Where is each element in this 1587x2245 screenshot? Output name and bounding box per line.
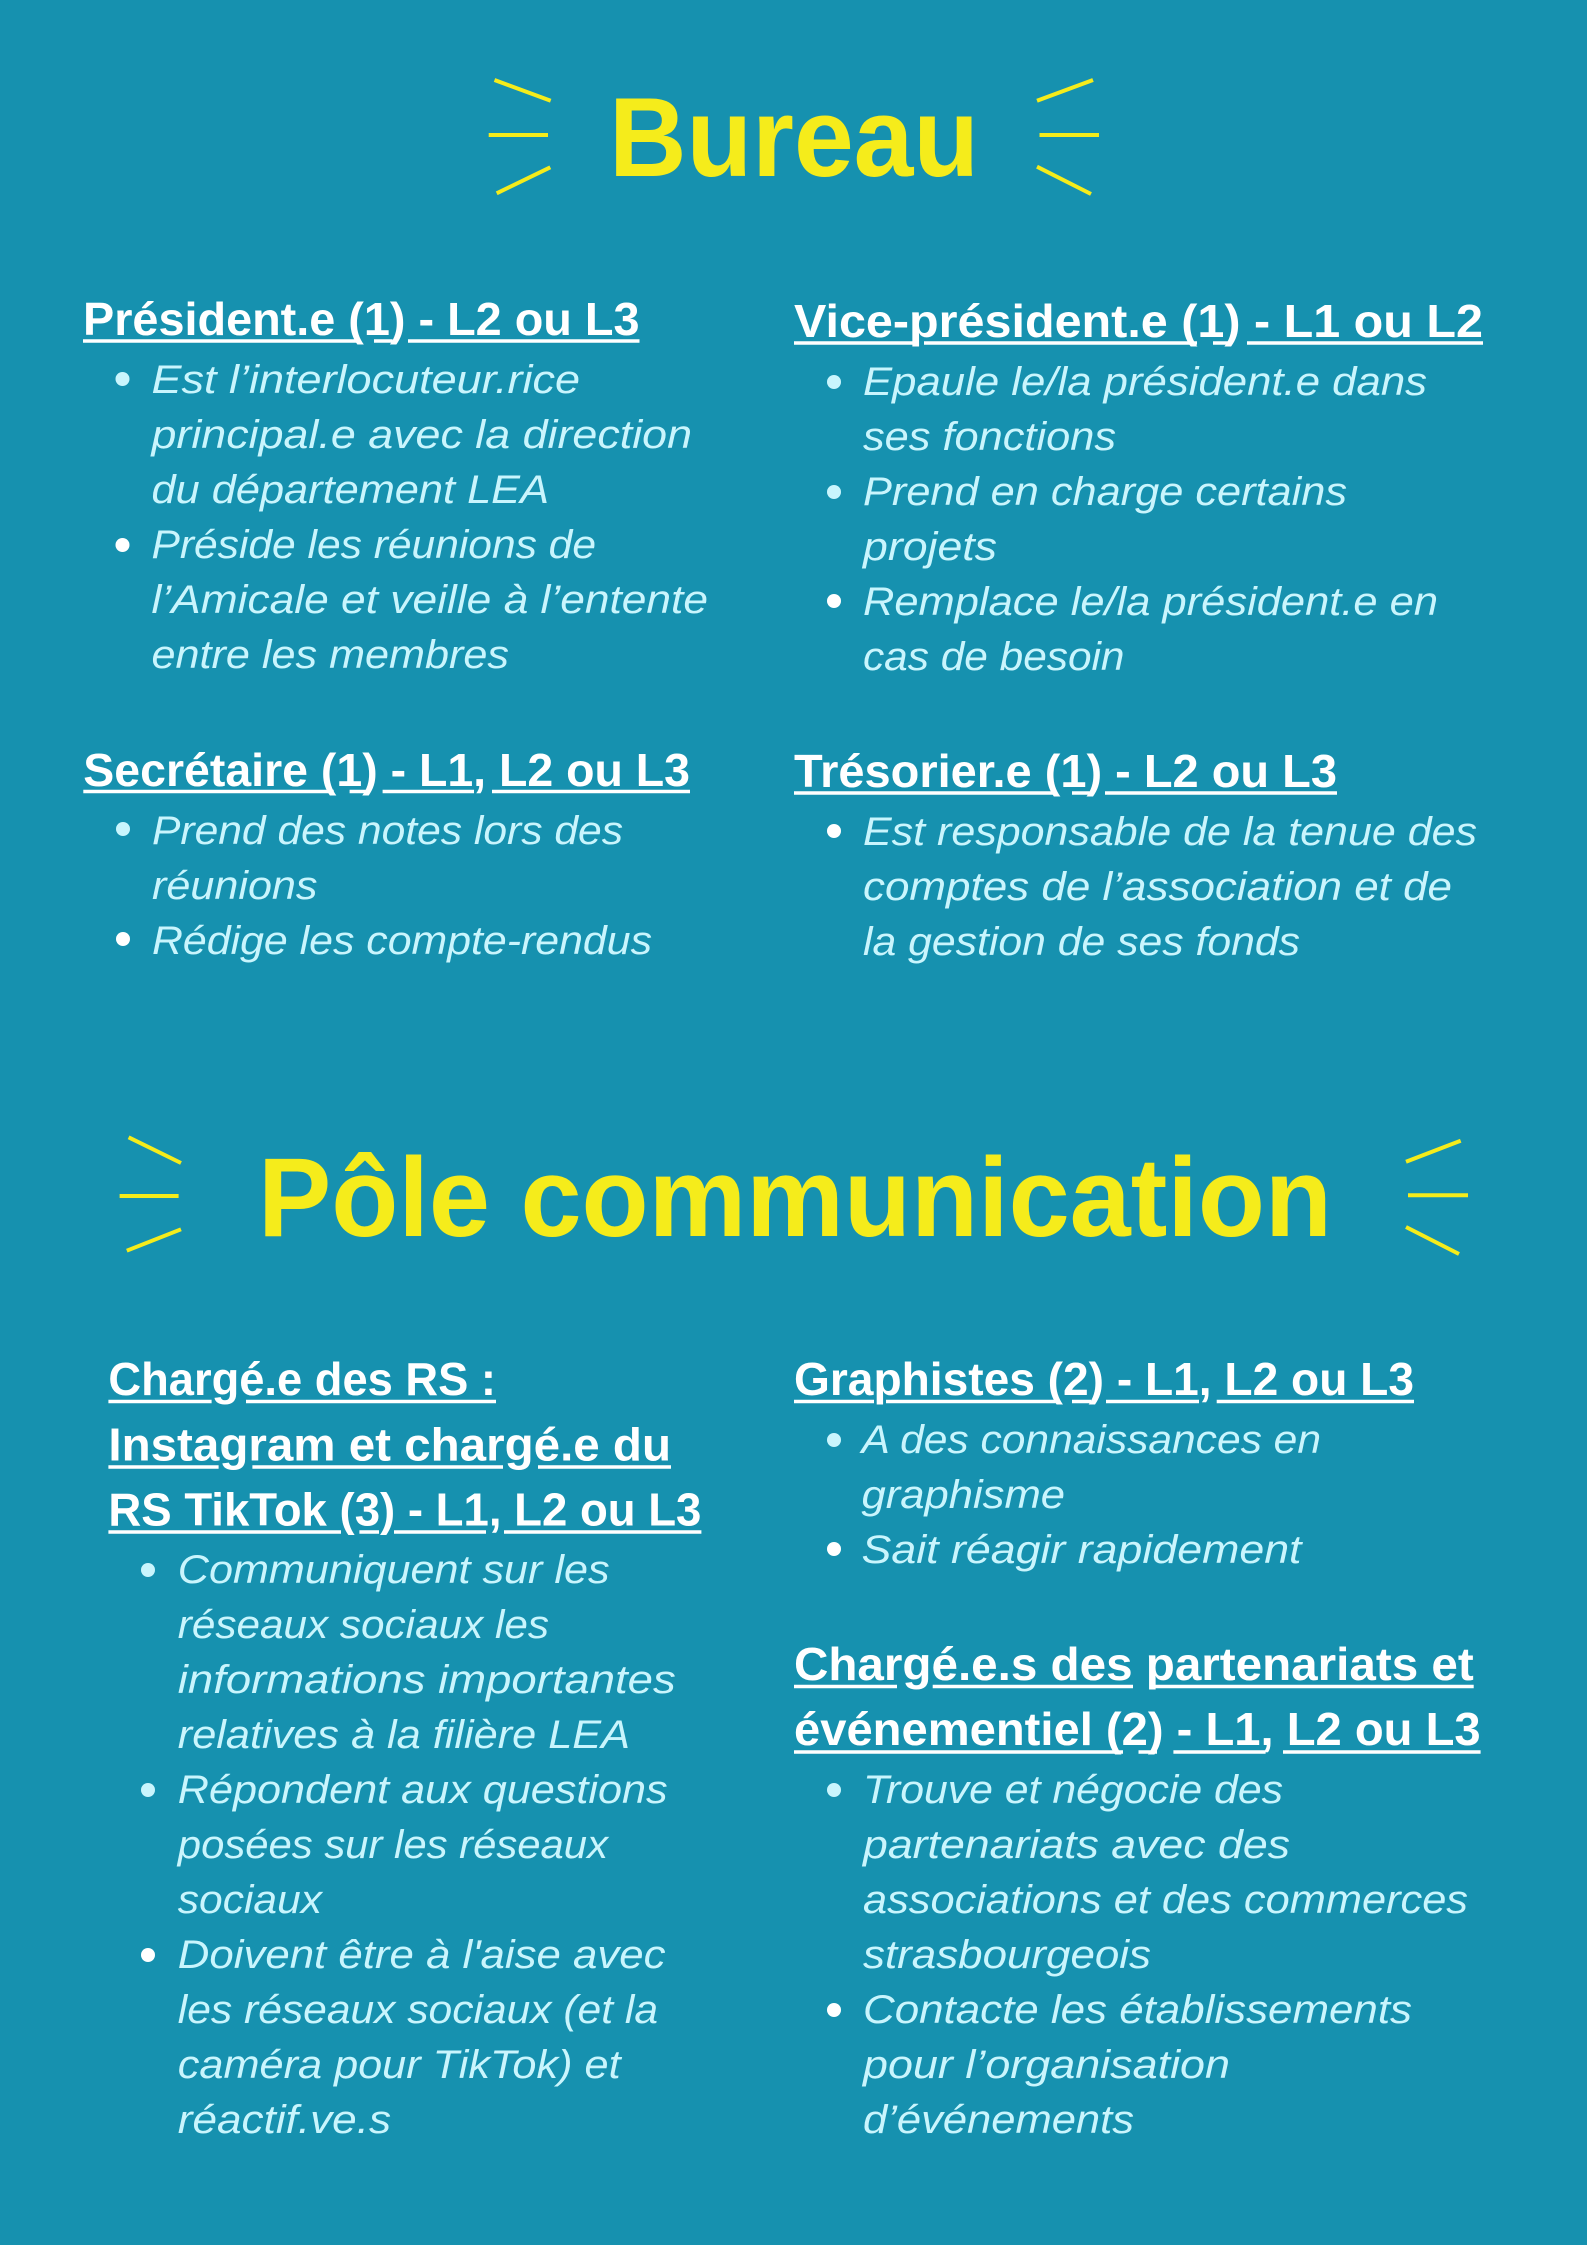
heading: Vice-président.e: Vice-président.e (1) - L1 ou L2 xyxy=(794,295,1483,347)
section: Pôle communication xyxy=(108,1135,1481,2142)
icon: right rays xyxy=(1406,1141,1468,1254)
list item: à l'aise xyxy=(141,1933,666,2142)
panel: Chargé.e des RS xyxy=(108,1353,701,2142)
list item: remplace xyxy=(827,580,1438,679)
heading: Chargé.e des RS xyxy=(108,1353,701,1536)
list item: réunions: l’Amicale et veille à l’entente xyxy=(152,578,708,622)
list item: graphisme: A des connaissances en xyxy=(859,1418,1321,1462)
list item: notes: Prend des notes lors des xyxy=(152,809,623,853)
list item: remplace: cas de besoin xyxy=(863,635,1124,679)
list item: répondent xyxy=(141,1768,668,1922)
heading: Chargé.e.s des partenariats: Chargé.e.s des partenariats et xyxy=(794,1638,1474,1690)
panel: Trésorier.e xyxy=(794,745,1477,964)
list item: projets: projets xyxy=(862,525,997,569)
heading: Graphistes: Graphistes (2) - L1, L2 ou L3 xyxy=(794,1353,1414,1405)
list item: notes: réunions xyxy=(152,864,318,908)
heading: Chargé.e.s des partenariats: événementiel (2) - L1, L2 ou L3 xyxy=(794,1703,1481,1755)
list item: épaule: ses fonctions xyxy=(863,415,1116,459)
section: Bureau xyxy=(83,75,1483,964)
panel: Secrétaire xyxy=(83,744,690,963)
list item: épaule: Epaule le/la président.e dans xyxy=(863,360,1427,404)
panel: Vice-président.e xyxy=(794,295,1483,679)
list item: répondent: Répondent aux questions xyxy=(178,1768,668,1812)
icon: left rays xyxy=(489,80,551,193)
heading: Secrétaire: Secrétaire (1) - L1, L2 ou L3 xyxy=(83,744,690,796)
list item: communiquent xyxy=(141,1548,676,1757)
list item: réunions: Préside les réunions de xyxy=(152,523,596,567)
list item: comptes: comptes de l’association et de xyxy=(863,865,1452,909)
list item: communiquent: réseaux sociaux les xyxy=(178,1603,549,1647)
list item: graphisme: graphisme xyxy=(862,1473,1065,1517)
list item: partenariats: associations et des commerces xyxy=(863,1878,1468,1922)
list item: graphisme xyxy=(827,1418,1321,1517)
list item: projets: Prend en charge certains xyxy=(863,470,1347,514)
heading: Chargé.e des RS: RS TikTok (3) - L1, L2 ou L3 xyxy=(108,1484,701,1536)
list item: compte-rendus: Rédige les compte-rendus xyxy=(152,919,652,963)
icon: right rays xyxy=(1037,80,1099,194)
list item: établissements: pour l’organisation xyxy=(862,2043,1230,2087)
list item: à l'aise: caméra pour TikTok) et xyxy=(178,2043,623,2087)
list item: répondent: sociaux xyxy=(178,1878,324,1922)
list item: notes xyxy=(116,809,623,908)
heading: Chargé.e des RS: Chargé.e des RS : xyxy=(108,1353,496,1405)
list item: partenariats xyxy=(827,1768,1468,1977)
list item: comptes: la gestion de ses fonds xyxy=(863,920,1300,964)
list item: partenariats: Trouve et négocie des xyxy=(863,1768,1283,1812)
list item: communiquent: Communiquent sur les xyxy=(178,1548,610,1592)
icon: left rays xyxy=(120,1137,181,1251)
list item: remplace: Remplace le/la président.e en xyxy=(863,580,1438,624)
list item: à l'aise: les réseaux sociaux (et la xyxy=(178,1988,658,2032)
list item: à l'aise: Doivent être à l'aise avec xyxy=(178,1933,666,1977)
list item: interlocuteur xyxy=(116,358,692,512)
list item: établissements: Contacte les établissements xyxy=(863,1988,1412,2032)
list item: partenariats: partenariats avec des xyxy=(862,1823,1290,1867)
list item: communiquent: relatives à la filière LEA xyxy=(178,1713,630,1757)
heading: Trésorier.e: Trésorier.e (1) - L2 ou L3 xyxy=(794,745,1337,797)
list item: partenariats: strasbourgeois xyxy=(863,1933,1151,1977)
list item: communiquent: informations importantes xyxy=(178,1658,676,1702)
list item: établissements: d’événements xyxy=(863,2098,1134,2142)
list item: interlocuteur: principal.e avec la direction xyxy=(150,413,692,457)
list item: réagir: Sait réagir rapidement xyxy=(862,1528,1304,1572)
list item: épaule xyxy=(827,360,1427,459)
list item: interlocuteur: du département LEA xyxy=(152,468,549,512)
panel: Président.e xyxy=(83,293,708,677)
list item: réunions xyxy=(116,523,708,677)
title: Bureau: Bureau xyxy=(609,75,979,200)
list item: réunions: entre les membres xyxy=(152,633,509,677)
title: Pôle communication: Pôle communication xyxy=(258,1135,1332,1260)
heading: Chargé.e des RS: Instagram et chargé.e du xyxy=(108,1419,671,1471)
list item: interlocuteur: Est l’interlocuteur.rice xyxy=(152,358,580,402)
heading: Chargé.e.s des partenariats xyxy=(794,1638,1481,1755)
list item: comptes xyxy=(827,810,1477,964)
list item: comptes: Est responsable de la tenue des xyxy=(863,810,1477,854)
list item: établissements xyxy=(827,1988,1412,2142)
list item: projets xyxy=(827,470,1347,569)
list item: répondent: posées sur les réseaux xyxy=(177,1823,610,1867)
panel: Graphistes xyxy=(794,1353,1414,1572)
heading: Président.e: Président.e (1) - L2 ou L3 xyxy=(83,293,640,345)
panel: Chargé.e.s des partenariats xyxy=(794,1638,1481,2142)
list item: à l'aise: réactif.ve.s xyxy=(178,2098,391,2142)
